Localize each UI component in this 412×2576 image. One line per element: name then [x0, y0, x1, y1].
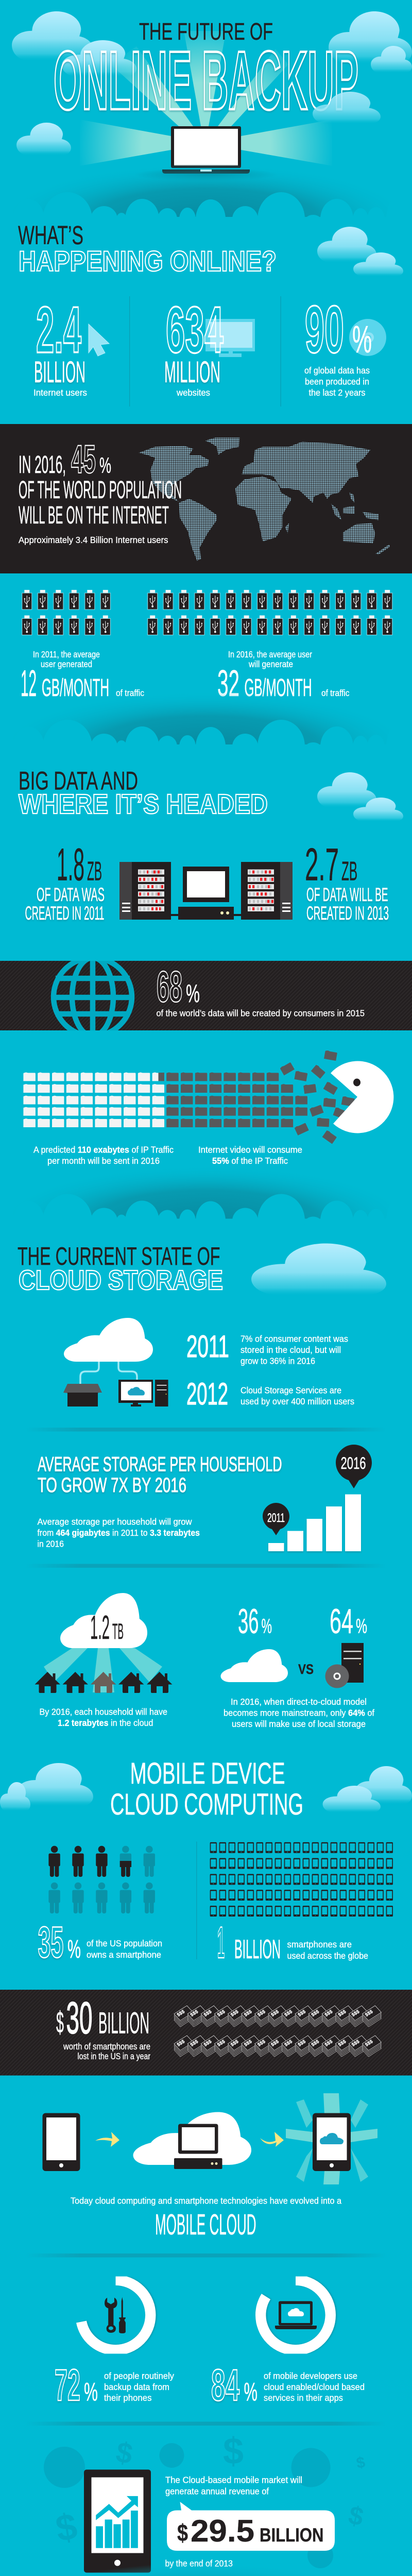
stat: 90% of global data: % — [352, 318, 372, 361]
comparison: cloud vs local storage: 64 — [330, 1602, 353, 1641]
heading: what's happening online — [18, 221, 277, 277]
pictogram: money stacks: $$$ — [324, 2009, 334, 2018]
panel: mobile market revenue — [44, 2431, 367, 2573]
comparison: cloud vs local storage: VS — [298, 1662, 314, 1677]
stat: 2.7 ZB: ZB — [341, 856, 357, 886]
stat: 1.8 ZB — [25, 839, 105, 924]
stat: 2012 cloud services — [186, 1377, 354, 1411]
text: storage growth — [37, 1517, 200, 1549]
heading: big data and where it's headed: BIG DATA AND — [19, 767, 138, 795]
pictogram: money stacks: $$$ — [311, 2039, 320, 2048]
background bubbles and dollar signs: $ — [53, 2505, 80, 2550]
pictogram: money stacks: $$$ — [243, 2009, 253, 2018]
text: $30 billion: 30 — [66, 1993, 93, 2043]
background clouds — [12, 11, 412, 156]
text: $30 billion: $ — [56, 2006, 64, 2039]
panel: world population band — [0, 424, 412, 573]
callout: $29.5 billion: $ — [177, 2519, 188, 2546]
pictogram: money stacks: $$$ — [364, 2039, 374, 2048]
light rays from laptop — [80, 31, 332, 166]
title: the future of: THE FUTURE OF — [139, 18, 273, 45]
text: storage growth: in 2016 — [37, 1538, 64, 1549]
pictogram: money stacks: $$$ — [364, 2009, 374, 2018]
icon: wrench and screwdriver — [105, 2297, 126, 2333]
illustration: phone to cloud to mobile cloud: MOBILE CLOUD — [155, 2208, 256, 2241]
illustration: 1.2 TB household cloud: 1.2 — [90, 1608, 110, 1646]
pictogram: money stacks: $$$ — [297, 2039, 307, 2048]
usb drives: 2016 — [148, 590, 392, 635]
stat: 634 million websites — [164, 293, 255, 398]
white folders — [23, 1072, 164, 1127]
comparison: cloud vs local storage: % — [262, 1615, 272, 1638]
stat: 84% mobile developers: services in their apps — [264, 2393, 343, 2403]
text: 68%: of the world’s data will be created by consumers in 2015 — [157, 1008, 365, 1018]
text: 68% — [157, 962, 365, 1018]
stat: 12 GB per month — [21, 649, 144, 704]
world dot map — [139, 437, 390, 561]
stat: 35% own a smartphone: 35 — [38, 1918, 64, 1967]
pictogram: money stacks: $$$ — [216, 2009, 227, 2018]
laptop shadow — [134, 168, 278, 181]
stat: 84% mobile developers: of mobile developers use — [264, 2371, 357, 2381]
illustration: 1.2 TB household cloud: By 2016, each household will have — [39, 1706, 167, 1717]
stat: 2.4 billion internet users: BILLION — [34, 355, 85, 389]
callout: $29.5 billion — [167, 2502, 335, 2551]
comparison: cloud vs local storage — [220, 1602, 374, 1729]
comparison: cloud vs local storage: users will make use of local storage — [232, 1719, 366, 1729]
infographic: the future of online backup: CREATED IN 2011 — [25, 903, 104, 924]
pictogram: money stacks: $$$ — [311, 2009, 320, 2018]
text: 68%: 68 — [157, 962, 182, 1011]
ring: 72% — [81, 2280, 150, 2350]
icon: servers and computer — [119, 862, 293, 920]
stat: 72% backup from phones: backup data from — [104, 2382, 169, 2392]
text: IP traffic captions: A predicted 110 exabytes of IP Traffic — [33, 1145, 174, 1155]
usb drives: 2011 — [22, 590, 110, 635]
stat: 72% backup from phones: 72 — [55, 2361, 80, 2410]
stat: 72% backup from phones: of people routinely — [104, 2371, 174, 2381]
hero banner — [12, 11, 412, 181]
panel: $30 billion lost smartphones: BILLION — [98, 2006, 149, 2040]
callout: $29.5 billion: 29.5 — [191, 2514, 254, 2548]
cloud band divider — [0, 2563, 412, 2576]
stat: 12 GB per month: 12 — [21, 663, 37, 704]
stat: 35% own a smartphone — [38, 1918, 162, 1967]
illustration: 1.2 TB household cloud — [35, 1593, 172, 1728]
callout: 2011: 2011 — [267, 1511, 285, 1525]
icon: houses — [35, 1672, 172, 1693]
heading cloud — [251, 1244, 386, 1296]
pictogram: money stacks: $$$ — [230, 2039, 240, 2048]
stat: 35% own a smartphone: % — [67, 1935, 81, 1963]
arrow — [95, 2132, 119, 2147]
comparison: cloud vs local storage: In 2016, when direct-to-cloud model — [231, 1697, 367, 1707]
pictogram: money stacks: $$$ — [203, 2009, 213, 2018]
pictogram: money stacks — [174, 2006, 381, 2057]
comparison: cloud vs local storage: % — [356, 1615, 367, 1638]
stat: 2011 consumer content: grow to 36% in 2016 — [241, 1356, 315, 1366]
divider — [196, 1841, 197, 1959]
background bubbles and dollar signs: $ — [223, 2431, 244, 2472]
pictogram: money stacks: $$$ — [190, 2009, 200, 2018]
text: $30 billion: worth of smartphones are — [63, 2041, 150, 2052]
stat: 84% mobile developers — [211, 2280, 365, 2410]
panel: world population band: WILL BE ON THE INTERNET — [19, 502, 169, 529]
stat: 32 GB per month: of traffic — [321, 688, 350, 698]
stat: 1.8 ZB: 1.8 — [57, 839, 84, 890]
heading: big data and where it's headed: WHERE IT’S HEADED — [19, 789, 268, 820]
icon: glowing phone with cloud — [286, 2093, 377, 2184]
pictogram: smartphone grid — [210, 1842, 393, 1917]
text: IP traffic captions — [33, 1145, 302, 1166]
stat: 1 billion smartphones — [217, 1918, 368, 1968]
cloud band divider — [0, 163, 412, 246]
stat: 634 million websites: 634 — [166, 293, 224, 366]
cloud band divider — [0, 691, 412, 773]
panel: world population band: OF THE WORLD POPULATION — [19, 477, 182, 504]
text: storage growth: from 464 gigabytes in 2011 to 3.3 terabytes — [37, 1528, 200, 1538]
panel: 68% consumers band — [0, 961, 412, 1030]
illustration: 1.2 TB household cloud: 1.2 terabytes in the cloud — [58, 1718, 153, 1728]
text: storage growth: Average storage per household will grow — [37, 1517, 192, 1527]
stat: 35% own a smartphone: of the US population — [87, 1938, 162, 1948]
background bubbles and dollar signs: $ — [355, 2454, 367, 2472]
stat: 2011 consumer content: 7% of consumer content was — [241, 1333, 348, 1344]
panel: mobile market revenue: The Cloud-based mobile market will — [165, 2475, 302, 2485]
bar chart: household storage — [263, 1445, 372, 1551]
pictogram: money stacks: $$$ — [176, 2009, 186, 2018]
heading: mobile device cloud computing: MOBILE DEVICE — [130, 1757, 285, 1790]
panel: mobile market revenue: by the end of 2013 — [165, 2558, 233, 2569]
heading: average storage per household: TO GROW 7X BY 2016 — [38, 1474, 186, 1497]
heading: current state of cloud storage: THE CURRENT STATE OF — [18, 1243, 220, 1270]
stat: 84% mobile developers: 84 — [211, 2361, 239, 2410]
panel: $30 billion lost smartphones — [0, 1990, 412, 2075]
stat: 35% own a smartphone: owns a smartphone — [87, 1950, 161, 1960]
illustration: 1.2 TB household cloud: TB — [112, 1619, 124, 1644]
stat: 1 billion smartphones: 1 — [217, 1918, 225, 1968]
heading: what's happening online: HAPPENING ONLINE? — [19, 245, 277, 277]
stat: 1 billion smartphones: BILLION — [234, 1935, 281, 1964]
pictogram: money stacks: $$$ — [324, 2039, 334, 2048]
background bubbles and dollar signs: $ — [114, 2435, 135, 2470]
text: 68%: % — [186, 980, 200, 1008]
panel: mobile market revenue: generate annual revenue of — [165, 2486, 269, 2497]
pictogram: money stacks: $$$ — [283, 2009, 294, 2018]
heading: mobile device cloud computing — [0, 1757, 412, 1821]
stat: 634 million websites: websites — [176, 387, 210, 398]
pictogram: money stacks: $$$ — [256, 2009, 267, 2018]
heading clouds — [317, 772, 403, 822]
icon: globe — [54, 956, 132, 1038]
stat: 90% of global data: the last 2 years — [309, 387, 366, 398]
pictogram: money stacks: $$$ — [216, 2039, 227, 2048]
icon: laptop — [162, 126, 250, 174]
pictogram: money stacks: $$$ — [230, 2009, 240, 2018]
heading clouds — [317, 227, 403, 277]
text: in 2016, 45% of the world population: 45 — [71, 437, 96, 482]
text: mobile cloud: Today cloud computing and smartphone technologies have evolved into a — [71, 2196, 341, 2206]
stat: 2.4 billion internet users: Internet users — [33, 387, 87, 398]
text: $30 billion: lost in the US in a year — [77, 2051, 150, 2061]
pictogram: money stacks: $$$ — [203, 2039, 213, 2048]
stat: 2.7 ZB: 2.7 — [305, 839, 339, 890]
callout: 2011 — [263, 1503, 289, 1535]
text: in 2016, 45% of the world population — [19, 437, 182, 545]
stat: 2011 consumer content — [186, 1329, 348, 1366]
text: IP traffic captions: Internet video will consume — [198, 1145, 302, 1155]
text: in 2016, 45% of the world population: % — [99, 453, 111, 478]
background bubbles and dollar signs — [44, 2431, 367, 2568]
stat: 90% of global data: 90 — [305, 292, 344, 367]
pictogram: money stacks: $$$ — [270, 2009, 280, 2018]
stat: 12 GB per month: of traffic — [116, 688, 144, 698]
icon: pacman — [331, 1061, 393, 1133]
dark folders — [159, 1072, 307, 1127]
cloud band divider — [0, 1165, 412, 1248]
stat: 2011 consumer content: 2011 — [186, 1329, 229, 1364]
stat: 12 GB per month: user generated — [41, 659, 92, 669]
stat: 32 GB per month: 32 — [217, 663, 239, 704]
stat: 90% of global data: been produced in — [305, 376, 369, 386]
comparison: cloud vs local storage: becomes more mainstream, only 64% of — [224, 1707, 374, 1718]
pictogram: people owning smartphones — [48, 1846, 155, 1913]
stat: 90% of global data — [304, 292, 386, 398]
stat: 84% mobile developers: % — [244, 2377, 258, 2406]
heading: average storage per household — [38, 1453, 282, 1497]
stat: 1.8 ZB: OF DATA WAS — [37, 884, 105, 905]
pictogram: money stacks: $$$ — [176, 2039, 186, 2048]
heading: what's happening online: WHAT’S — [18, 221, 83, 250]
stat: 2012 cloud services: Cloud Storage Services are — [241, 1385, 341, 1395]
pictogram: money stacks: $$$ — [351, 2009, 361, 2018]
pictogram: money stacks: $$$ — [270, 2039, 280, 2048]
comparison: cloud vs local storage: 36 — [238, 1602, 259, 1641]
illustration: phone to cloud to mobile cloud — [42, 2093, 377, 2241]
icon: tablet with growth chart — [84, 2470, 151, 2573]
stat: 12 GB per month: In 2011, the average — [33, 649, 100, 659]
stat: 2012 cloud services: 2012 — [186, 1377, 228, 1411]
pictogram: money stacks: $$$ — [283, 2039, 294, 2048]
stat: 2011 consumer content: stored in the cloud, but will — [241, 1345, 341, 1355]
text: in 2016, 45% of the world population: IN 2016, — [19, 451, 66, 479]
pictogram: money stacks: $$$ — [243, 2039, 253, 2048]
pictogram: money stacks: $$$ — [351, 2039, 361, 2048]
ring: 84% — [261, 2280, 331, 2350]
heading: current state of cloud storage: CLOUD STORAGE — [19, 1265, 223, 1296]
pictogram: money stacks: $$$ — [337, 2009, 348, 2018]
chart: folders of IP traffic eaten by pacman — [23, 1050, 393, 1144]
text: IP traffic captions: 55% of the IP Traffic — [212, 1156, 288, 1166]
pictogram: money stacks: $$$ — [297, 2009, 307, 2018]
heading: big data and where it's headed — [19, 767, 268, 820]
icon: cloud linked to box and computer — [63, 1318, 168, 1406]
stat: 12 GB per month: GB/MONTH — [42, 674, 109, 702]
cloud over title — [313, 92, 381, 124]
stat: 72% backup from phones — [55, 2280, 174, 2410]
stat: 32 GB per month: GB/MONTH — [244, 674, 312, 702]
stat: 1 billion smartphones: used across the globe — [287, 1951, 368, 1961]
stat: 2.4 billion internet users: 2.4 — [36, 293, 81, 366]
pictogram: money stacks: $$$ — [190, 2039, 200, 2048]
text: IP traffic captions: per month will be sent in 2016 — [47, 1156, 160, 1166]
pictogram: money stacks: $$$ — [256, 2039, 267, 2048]
icon: left phone — [42, 2113, 80, 2171]
stat: 1 billion smartphones: smartphones are — [287, 1939, 352, 1950]
pictogram: money stacks: $$$ — [337, 2039, 348, 2048]
stat: 1.8 ZB: ZB — [87, 856, 102, 886]
stat: 90% of global data: of global data has — [304, 365, 370, 376]
stat: 634 million websites: MILLION — [164, 355, 220, 389]
icon: cloud with computer — [133, 2112, 251, 2169]
stat: 72% backup from phones: % — [84, 2377, 98, 2406]
stat: 32 GB per month: will generate — [248, 659, 293, 669]
text: $30 billion — [56, 1993, 150, 2061]
flying folders — [280, 1050, 355, 1144]
arrow — [260, 2132, 284, 2147]
stat: 84% mobile developers: cloud enabled/cloud based — [264, 2382, 365, 2392]
heading: mobile device cloud computing: CLOUD COMPUTING — [110, 1788, 303, 1821]
background bubbles and dollar signs: $ — [346, 2500, 366, 2532]
stat: 2.7 ZB — [305, 839, 389, 924]
stat dividers — [129, 296, 281, 406]
callout: 2016 — [336, 1445, 372, 1488]
callout: 2016: 2016 — [341, 1454, 366, 1472]
stat: 2012 cloud services: used by over 400 million users — [241, 1396, 354, 1406]
callout: $29.5 billion: BILLION — [260, 2524, 323, 2546]
text: in 2016, 45% of the world population: Approximately 3.4 Billion Internet users — [19, 535, 168, 545]
stat: 32 GB per month: In 2016, the average user — [228, 649, 312, 659]
heading: current state of cloud storage — [18, 1243, 223, 1296]
icon: laptop with cloud — [275, 2301, 317, 2329]
stat: 2.4 billion internet users — [33, 293, 109, 398]
stat: 32 GB per month — [217, 649, 350, 704]
stat: 72% backup from phones: their phones — [104, 2393, 152, 2403]
